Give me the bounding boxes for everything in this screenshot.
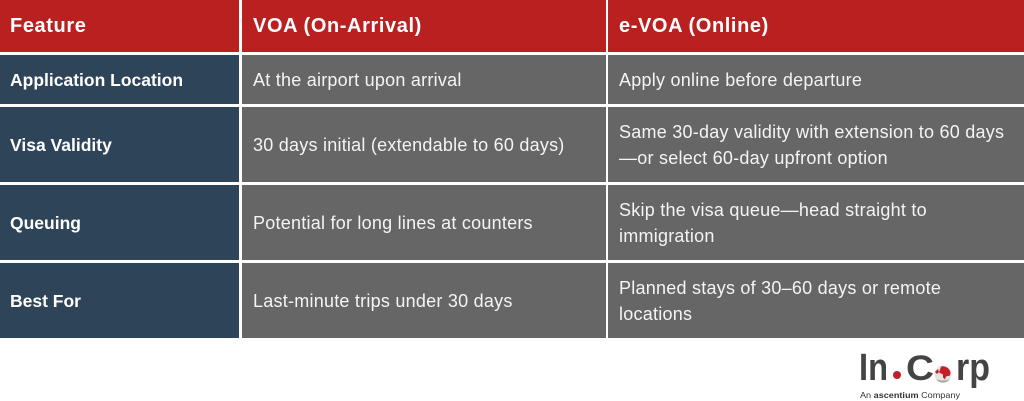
e-VOA visa validity: —or select 60-day upfront option xyxy=(619,148,888,168)
VOA application location: At the airport upon arrival xyxy=(253,70,462,90)
row label: Best For: Best For xyxy=(10,291,81,311)
logo wordmark xyxy=(859,347,990,389)
e-VOA best for: Planned stays of 30–60 days or remote xyxy=(619,278,941,298)
logo wordmark: C xyxy=(906,349,934,388)
e-VOA application location: Apply online before departure xyxy=(619,70,862,90)
e-VOA best for: locations xyxy=(619,304,692,324)
row label: Queuing: Queuing xyxy=(10,213,81,233)
e-VOA best for xyxy=(608,263,1024,338)
VOA best for: Last-minute trips under 30 days xyxy=(253,291,513,311)
header: Feature: Feature xyxy=(10,15,86,37)
row label: Queuing xyxy=(0,185,239,260)
row label: Best For xyxy=(0,263,239,338)
e-VOA queuing: immigration xyxy=(619,226,715,246)
e-VOA application location xyxy=(608,55,1024,104)
VOA visa validity xyxy=(242,107,606,182)
VOA application location xyxy=(242,55,606,104)
e-VOA visa validity xyxy=(608,107,1024,182)
icon: globe xyxy=(934,366,952,383)
row label: Application Location: Application Location xyxy=(10,70,183,90)
VOA visa validity: 30 days initial (extendable to 60 days) xyxy=(253,135,565,155)
VOA best for xyxy=(242,263,606,338)
logo wordmark: In xyxy=(859,347,888,389)
VOA queuing: Potential for long lines at counters xyxy=(253,213,533,233)
InCorp logo xyxy=(859,347,990,400)
tagline: An ascentium Company xyxy=(860,390,961,400)
row label: Application Location xyxy=(0,55,239,104)
header: e-VOA (Online) xyxy=(608,0,1024,52)
header: VOA (On-Arrival): VOA (On-Arrival) xyxy=(253,15,422,37)
logo wordmark: rp xyxy=(956,347,990,389)
header: VOA (On-Arrival) xyxy=(242,0,606,52)
header: Feature xyxy=(0,0,239,52)
e-VOA visa validity: Same 30-day validity with extension to 60 days xyxy=(619,122,1004,142)
row label: Visa Validity xyxy=(0,107,239,182)
header: e-VOA (Online): e-VOA (Online) xyxy=(619,15,769,37)
e-VOA queuing xyxy=(608,185,1024,260)
VOA queuing xyxy=(242,185,606,260)
e-VOA queuing: Skip the visa queue—head straight to xyxy=(619,200,927,220)
row label: Visa Validity: Visa Validity xyxy=(10,135,112,155)
